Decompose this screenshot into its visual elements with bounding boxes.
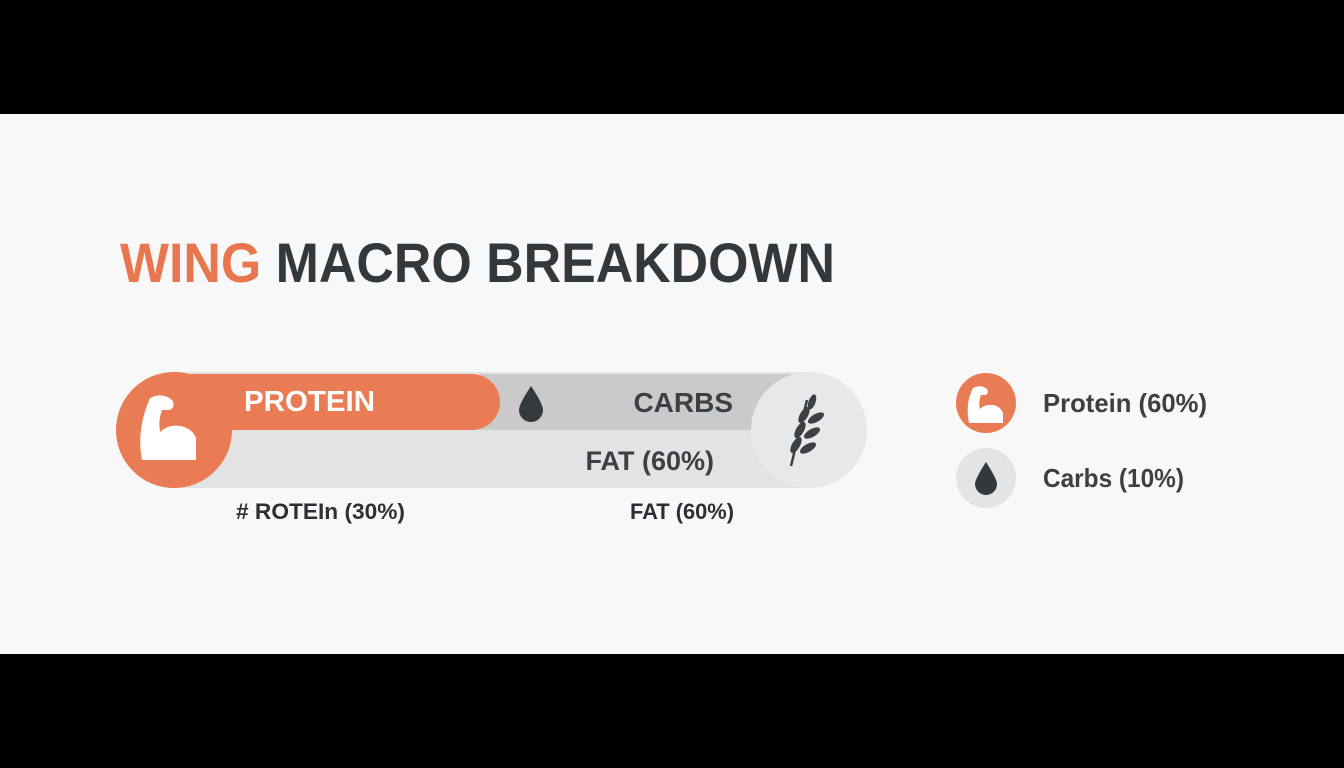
legend: Protein (60%) [1043, 388, 1207, 418]
legend: Carbs (10%) [1043, 463, 1184, 493]
label: protein: PROTEIN [244, 386, 375, 418]
caption: fat: FAT (60%) [630, 499, 734, 524]
icon: wheat [788, 393, 826, 466]
macro bar chart [116, 372, 867, 488]
icon: muscle [140, 395, 196, 460]
icon: drop [519, 386, 543, 422]
label: carbs: CARBS [633, 387, 733, 418]
legend [956, 373, 1207, 508]
caption: protein: # ROTEIn (30%) [236, 499, 405, 524]
main canvas [0, 114, 1344, 654]
label: fat: FAT (60%) [585, 446, 714, 476]
title: WING MACRO BREAKDOWN [120, 231, 835, 294]
